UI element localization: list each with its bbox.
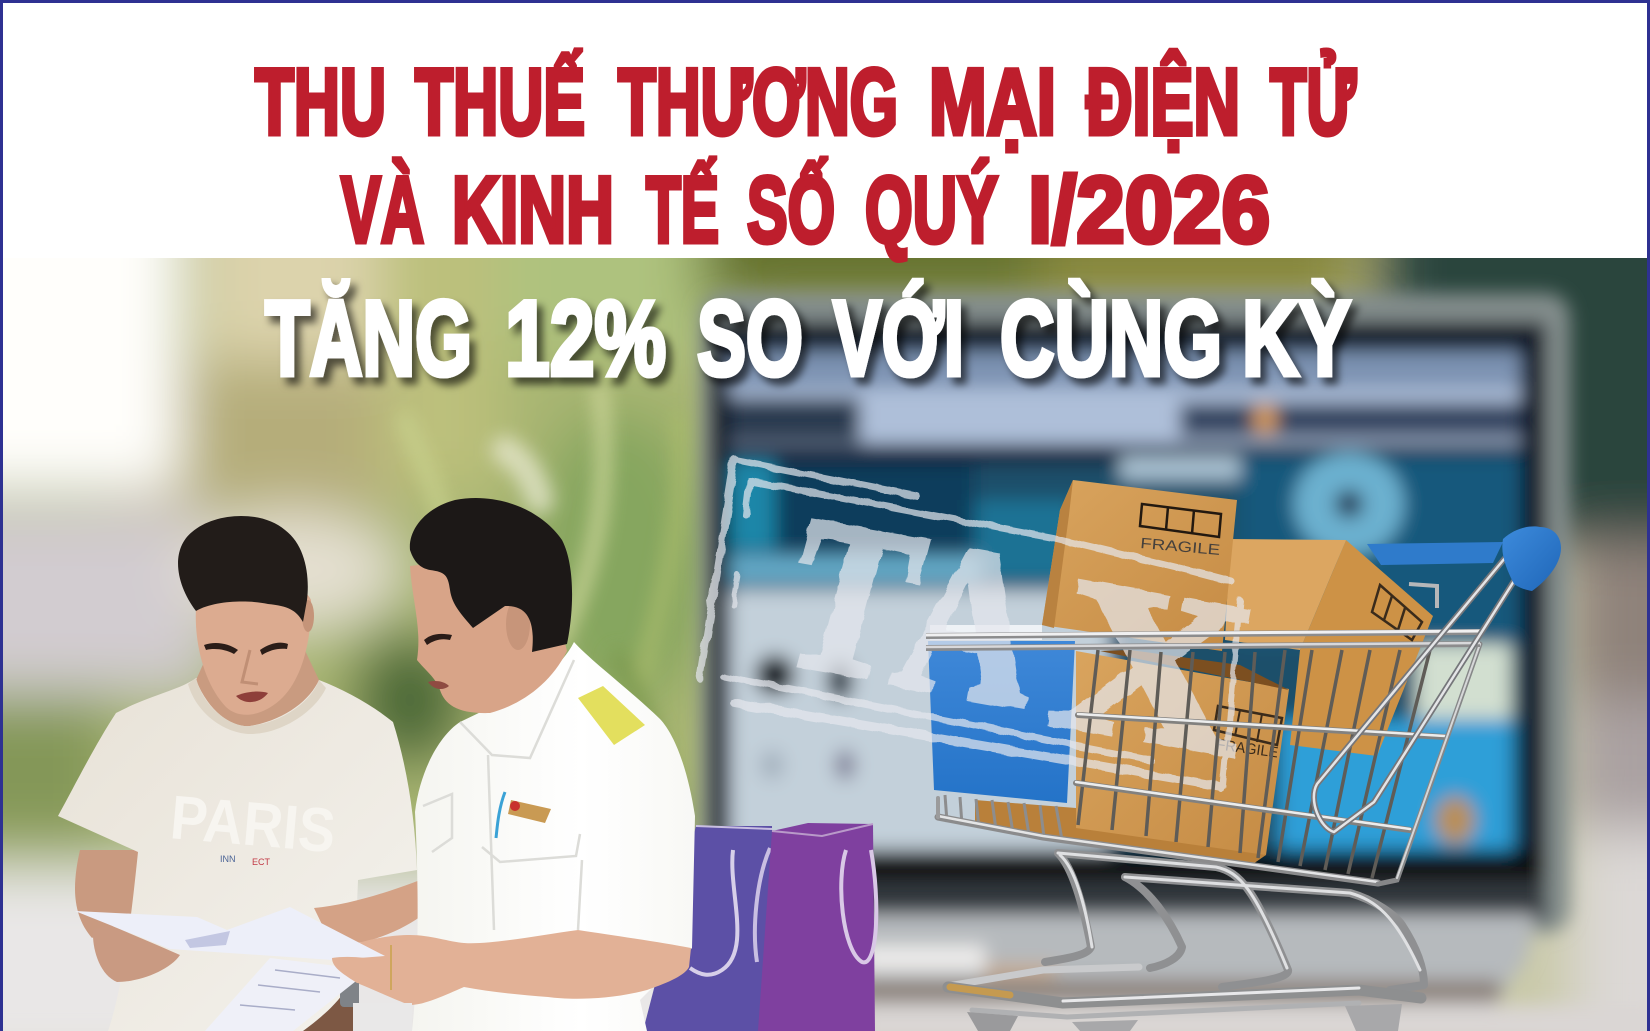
title line two: VÀ: [341, 157, 424, 262]
printed symbols: [1372, 585, 1422, 640]
T-shirt: [58, 678, 417, 1031]
title line two: SỐ: [747, 157, 835, 262]
uniform shirt: [412, 642, 695, 1031]
hair: [178, 516, 308, 622]
title line one: MẠI: [929, 49, 1056, 154]
fragile mark: FRAGILE: [1140, 535, 1221, 559]
subtitle: increase compared with same period: TĂNG: [265, 278, 472, 398]
face: [196, 582, 311, 715]
neck and face: [410, 560, 567, 713]
tax stamp overlay: [700, 460, 1267, 802]
fragile mark: FRAGILE: [1215, 736, 1279, 762]
cart horizontal rails: [938, 644, 1480, 884]
person: tax officer in white uniform: [75, 498, 695, 1031]
hair: [410, 498, 572, 652]
blue cart panel: [928, 625, 1075, 803]
epaulette: [578, 686, 645, 745]
facial features: [424, 634, 452, 689]
plant streaks: [405, 390, 682, 820]
subtitle: increase compared with same period: VỚI: [833, 278, 964, 398]
title line one: [255, 49, 1356, 154]
collar and pocket creases: [423, 660, 582, 930]
TAX letters: A: [883, 493, 1058, 754]
near arm reaching over: [314, 878, 425, 945]
TAX letters: T: [760, 472, 943, 727]
shirt wording: PARIS: [168, 783, 338, 866]
title line two: I/2026: [1028, 157, 1270, 262]
blurred laptop: [700, 293, 1650, 1031]
ear: [506, 598, 530, 650]
neck and collar: [196, 640, 319, 726]
name badge: [496, 792, 551, 838]
shopping cart with parcels: [700, 460, 1561, 1031]
title line one: TỬ: [1270, 49, 1356, 154]
cart legs and base: [948, 853, 1424, 1031]
cart rim: [926, 631, 1480, 648]
fragile mark: [1214, 706, 1282, 762]
subtitle: increase compared with same period: KỲ: [1242, 278, 1351, 398]
ear: [302, 600, 314, 632]
TAX letters: [760, 472, 1267, 802]
shirt wording: ECT: [252, 857, 271, 867]
title line two: QUÝ: [865, 157, 998, 262]
title line two: KINH: [452, 157, 614, 262]
parcel: tall front box: [1042, 480, 1237, 651]
parcel: back large box: [1225, 539, 1433, 756]
fragile mark: [1140, 504, 1221, 559]
subtitle: increase compared with same period: CÙNG: [1000, 278, 1222, 398]
title line two: TẾ: [646, 157, 719, 262]
title line one: THU: [255, 49, 386, 154]
cart wires: [945, 650, 1430, 878]
left upper arm: [75, 850, 140, 938]
subtitle: increase compared with same period: 12%: [505, 278, 666, 398]
title line one: THUẾ: [415, 49, 585, 154]
parcel: bottom box: [975, 650, 1289, 866]
wedding band thread: [390, 945, 392, 990]
title line two: [341, 157, 1270, 262]
subtitle: increase compared with same period: SO: [697, 278, 803, 398]
blue-violet bag: [643, 826, 772, 1031]
TAX letters: X: [1038, 531, 1267, 802]
title line one: ĐIỆN: [1086, 49, 1240, 154]
person: taxpayer in cream T-shirt: [58, 516, 417, 1031]
forearm: [340, 930, 691, 1005]
purple bag: [758, 823, 876, 1031]
title banner: [0, 0, 1650, 262]
eyes and mouth: [204, 643, 288, 702]
shirt wording: INN: [220, 854, 236, 864]
left hand: [93, 925, 180, 982]
finger over paper: [332, 957, 395, 985]
watch and far arm: [303, 980, 412, 1031]
title line one: THƯƠNG: [618, 49, 898, 154]
documents: [75, 907, 385, 1031]
cart handle: [1314, 526, 1561, 832]
subtitle: increase compared with same period: [265, 278, 1351, 398]
shopping bags: [643, 823, 876, 1031]
